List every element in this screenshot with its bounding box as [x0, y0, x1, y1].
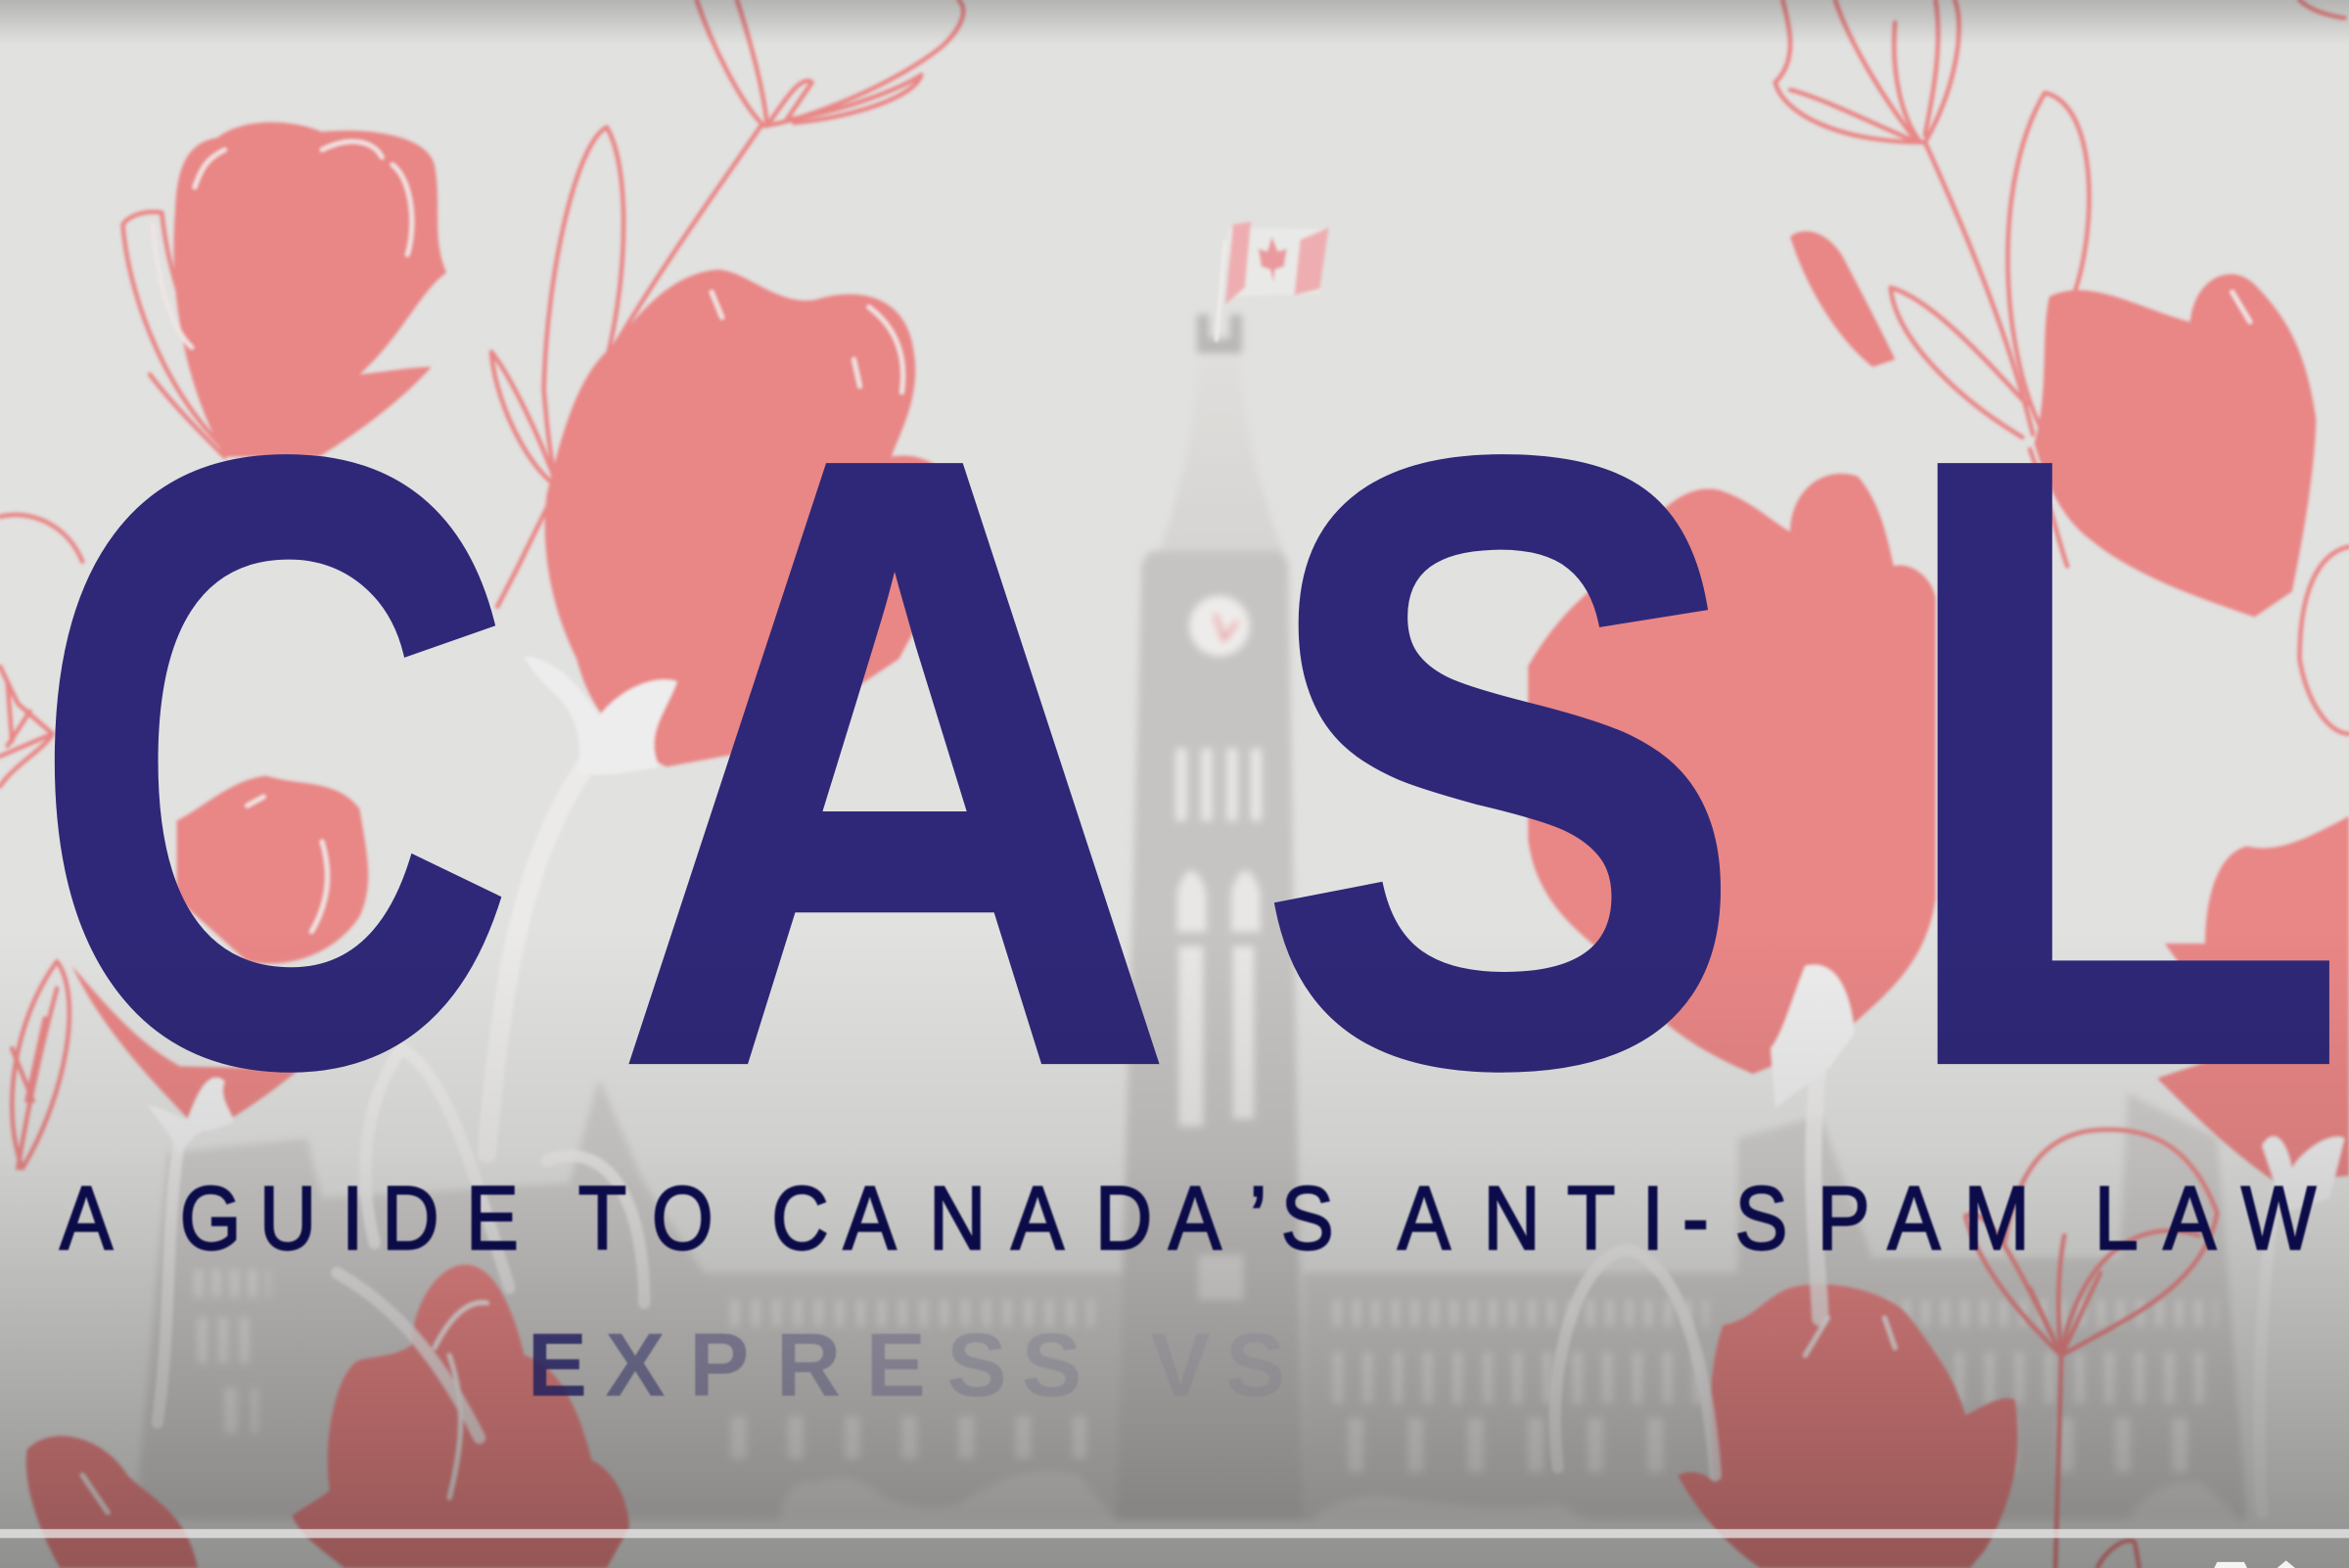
outline: lower left leaf — [12, 961, 69, 1168]
flower: top left tulip — [173, 122, 446, 457]
flower: bottom left bud — [26, 1436, 198, 1568]
right wing — [1304, 1093, 2247, 1520]
white leaf: centre — [525, 656, 677, 775]
letter S: S — [1257, 280, 1746, 1244]
parliament building — [135, 314, 2247, 1520]
stem — [607, 126, 761, 359]
fading caption: EXPRESS VS: S — [1225, 1315, 1285, 1415]
outline: top right — [1775, 0, 1958, 142]
letter A: A — [615, 280, 1175, 1243]
fading caption: EXPRESS VS: E — [528, 1315, 587, 1415]
clock hands — [1215, 614, 1237, 639]
fading caption: EXPRESS VS: S — [1022, 1315, 1082, 1415]
title: CASL — [30, 279, 2349, 1244]
shrubs — [779, 1471, 2239, 1520]
flagpole — [1217, 240, 1225, 342]
fading caption: EXPRESS VS: V — [1151, 1315, 1211, 1415]
fading caption: EXPRESS VS: S — [946, 1315, 1007, 1415]
video bottom shade — [0, 929, 2349, 1568]
flag red bars — [1225, 221, 1329, 304]
fading caption: EXPRESS VS: P — [689, 1315, 749, 1415]
spire top — [1197, 314, 1242, 353]
flower: top right tulip — [2035, 274, 2316, 617]
white leaf: far right — [2262, 1136, 2344, 1213]
canadian flag — [1217, 221, 1329, 342]
letter L: L — [1891, 280, 2349, 1244]
flower: bottom left tulip — [292, 1265, 629, 1568]
flower: right edge tulip — [2157, 816, 2349, 1183]
flower: bottom right tulip — [1678, 1284, 2017, 1568]
letter C: C — [30, 279, 516, 1244]
white stems and leaves — [158, 763, 2280, 1512]
white leaf: lower left — [147, 1078, 233, 1153]
flower: big tulip behind A — [545, 269, 974, 766]
fading caption: EXPRESS VS: E — [866, 1315, 926, 1415]
clock face — [1189, 596, 1250, 656]
fading caption: EXPRESS VS — [528, 1315, 1285, 1415]
wing windows — [195, 1283, 2217, 1446]
outline: left of C — [123, 212, 225, 457]
flower: tulip inside C — [177, 776, 368, 964]
video progress bar — [0, 1529, 2349, 1538]
leaf: top right small bud — [1790, 231, 1895, 367]
white leaf: lower right — [1771, 965, 1855, 1108]
flower: large tulip behind S — [1528, 474, 1936, 1074]
video control fragment — [2214, 1560, 2295, 1568]
subtitle: A GUIDE TO CANADA’S ANTI-SPAM LAW — [60, 1169, 2316, 1268]
outline: bottom right flower — [1965, 1130, 2217, 1568]
fading caption: EXPRESS VS: R — [776, 1315, 841, 1415]
tower windows — [1176, 749, 1262, 1300]
spire — [1157, 359, 1285, 557]
maple leaf — [1259, 237, 1287, 282]
flower: petal below C — [71, 966, 299, 1133]
flag white field — [1228, 228, 1329, 297]
outline: left edge — [0, 515, 82, 786]
fading caption: EXPRESS VS: X — [605, 1315, 666, 1415]
video top shade — [0, 0, 2349, 45]
left wing — [135, 1079, 1124, 1520]
tower — [1116, 551, 1304, 1520]
